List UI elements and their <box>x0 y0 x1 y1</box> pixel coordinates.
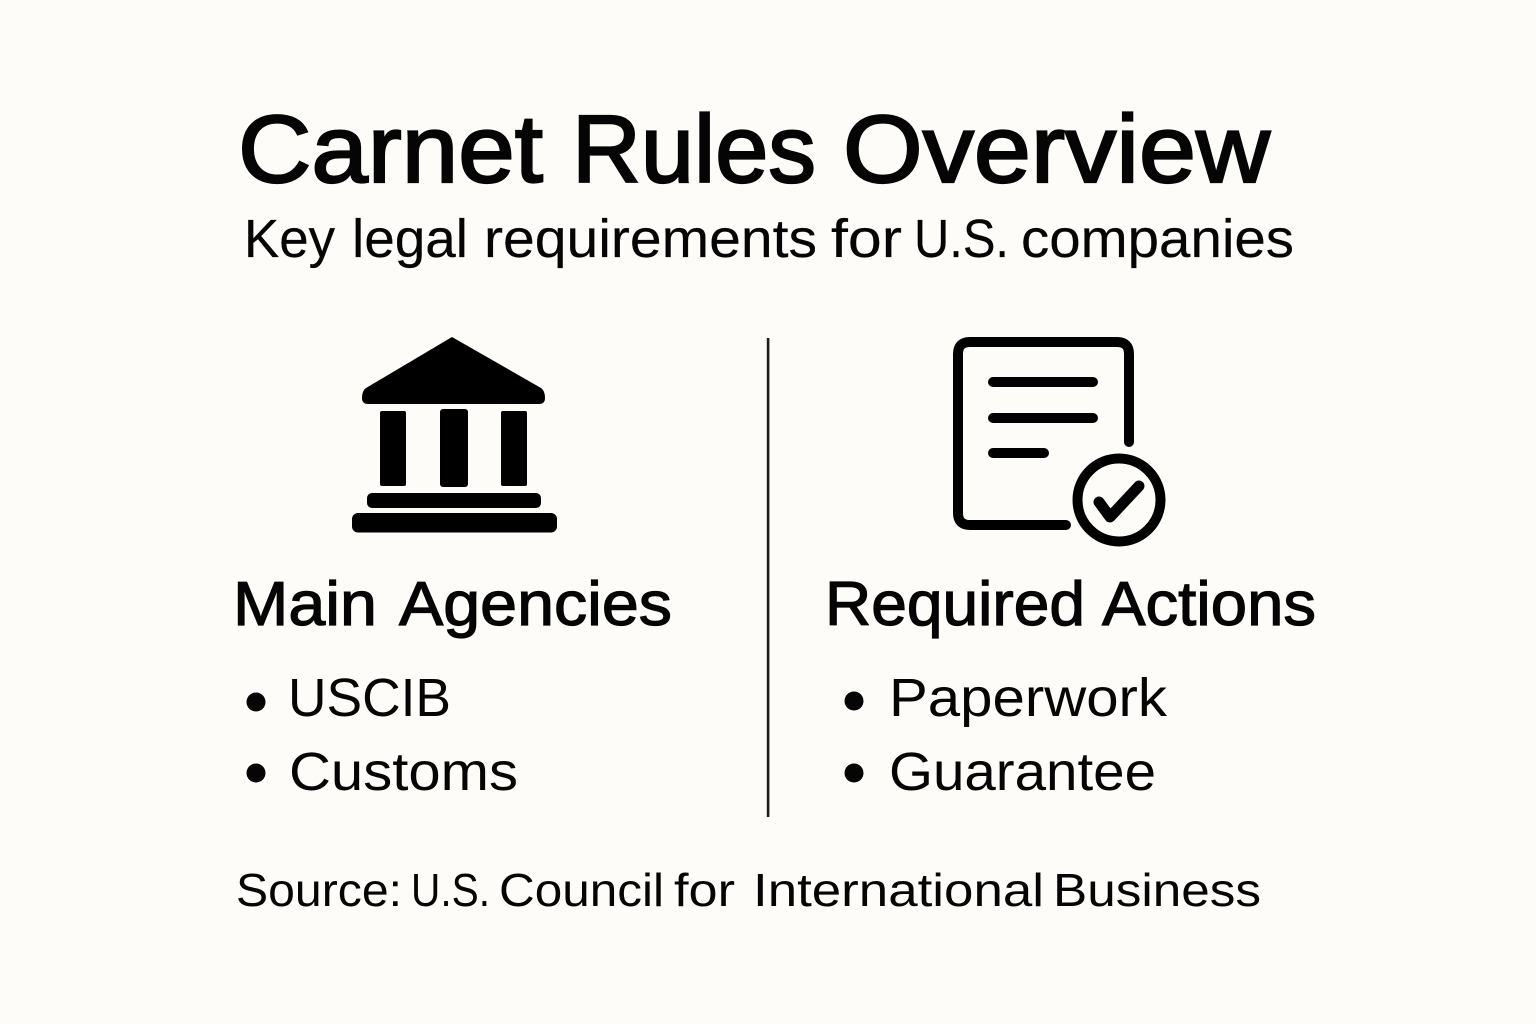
list: actions: Guarantee <box>889 742 1156 802</box>
title: Rules <box>572 96 816 203</box>
subtitle: requirements <box>484 209 817 269</box>
title <box>238 96 1271 203</box>
icon: government building <box>352 337 557 532</box>
heading: required actions: Actions <box>1102 570 1316 639</box>
subtitle: legal <box>352 209 468 269</box>
list: agencies: USCIB <box>288 668 451 728</box>
heading: main agencies <box>233 570 672 639</box>
title: Overview <box>843 96 1271 203</box>
panel: main agencies <box>233 337 672 802</box>
source line: International <box>753 864 1044 916</box>
subtitle: U.S. <box>914 209 1009 269</box>
panel: required actions <box>825 342 1316 802</box>
title: Carnet <box>238 96 543 203</box>
list: agencies: Customs <box>289 742 518 802</box>
icon: document with check mark <box>958 342 1160 542</box>
heading: main agencies: Main <box>233 570 377 639</box>
list: actions <box>844 668 1168 802</box>
source line: for <box>674 864 735 916</box>
source line: Business <box>1053 864 1261 916</box>
subtitle: companies <box>1021 209 1294 269</box>
source line: Source: <box>236 864 402 916</box>
list: actions: Paperwork <box>889 668 1168 728</box>
source line <box>236 864 1261 916</box>
subtitle <box>244 209 1294 269</box>
heading: required actions: Required <box>825 570 1085 639</box>
source line: U.S. <box>411 864 490 916</box>
subtitle: Key <box>244 209 335 269</box>
heading: required actions <box>825 570 1316 639</box>
divider <box>767 338 769 817</box>
list: agencies <box>246 668 518 802</box>
subtitle: for <box>831 209 902 269</box>
source line: Council <box>499 864 664 916</box>
heading: main agencies: Agencies <box>399 570 672 639</box>
